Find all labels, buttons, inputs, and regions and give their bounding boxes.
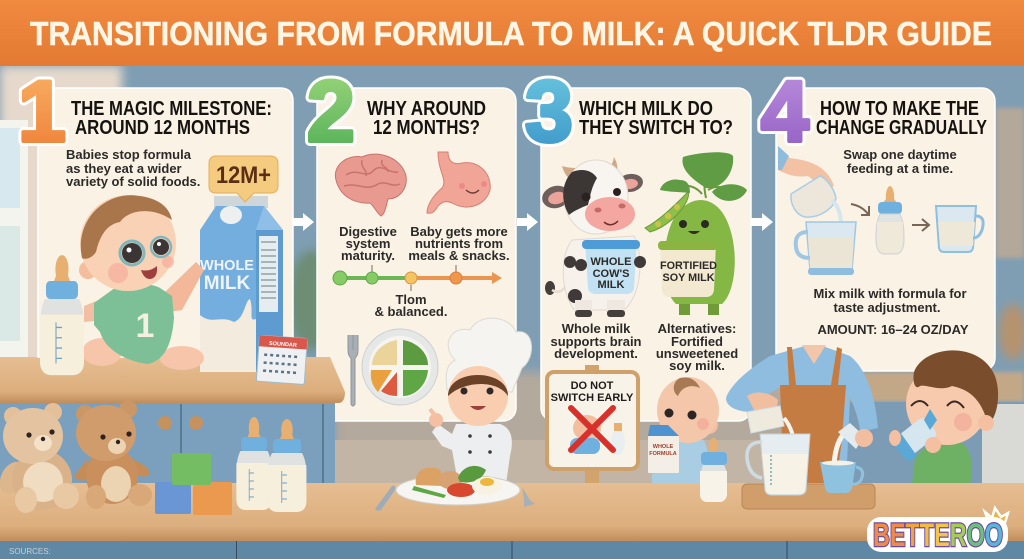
illustration: baby with carton xyxy=(648,377,719,484)
big numeral 4: 4 xyxy=(761,64,809,160)
arrow: step 3 to 4 xyxy=(751,213,773,231)
text: intro: variety of solid foods. xyxy=(66,174,200,189)
big numeral 4: 4 xyxy=(761,64,809,160)
teddy bear left xyxy=(0,403,79,513)
icon: brain xyxy=(335,154,406,216)
heading: step 3: WHICH MILK DO xyxy=(579,98,713,120)
icon: calendar xyxy=(256,335,307,384)
food plate xyxy=(396,466,520,505)
label: whole cow's milk: COW'S xyxy=(593,268,629,280)
wooden counter xyxy=(0,483,1024,541)
text: nutrients: nutrients from xyxy=(415,236,503,251)
text: amount: AMOUNT: 16–24 OZ/DAY xyxy=(818,322,969,337)
icon: baby bottle xyxy=(40,255,84,375)
text: whole milk: development. xyxy=(554,346,638,361)
carton label: WHOLE xyxy=(200,258,254,274)
arrow: bottle to cup xyxy=(912,219,929,231)
heading: step 1: THE MAGIC MILESTONE: xyxy=(71,98,272,120)
text: whole milk: supports brain xyxy=(550,334,642,349)
logo: Betteroo: BETTEROO xyxy=(873,517,1003,553)
illustration: parent pouring milk xyxy=(726,345,878,484)
icon: measuring jug xyxy=(796,222,856,275)
label: whole cow's milk: MILK xyxy=(598,279,624,291)
small carton: FORMULA xyxy=(649,451,677,457)
text: alternatives: unsweetened xyxy=(656,346,738,361)
small carton xyxy=(648,425,679,473)
icon: small bottles on counter xyxy=(236,417,306,512)
callout: 12M+ xyxy=(209,156,278,202)
text: digestive: Digestive xyxy=(339,224,397,239)
cabinet under shelf xyxy=(0,400,335,485)
callout: 12M+: 12M+ xyxy=(216,162,271,189)
icon: knife xyxy=(375,486,395,511)
teddy bear right xyxy=(74,400,152,509)
text: whole milk: Whole milk xyxy=(562,321,631,336)
bottom cabinet strip xyxy=(0,541,1024,559)
heading: step 1: AROUND 12 MONTHS xyxy=(75,117,250,139)
panel: step 2 xyxy=(317,88,516,421)
illustration: chef boy xyxy=(429,318,532,484)
text: swap: feeding at a time. xyxy=(847,161,953,176)
wooden shelf xyxy=(0,357,345,403)
panel: step 4 xyxy=(776,88,995,371)
heading: step 2: WHY AROUND xyxy=(367,98,486,120)
sign: do not switch early xyxy=(547,365,638,485)
text: swap: Swap one daytime xyxy=(843,147,957,162)
milk carton xyxy=(200,196,283,372)
big numeral 1: 1 xyxy=(18,64,66,160)
text: mix: taste adjustment. xyxy=(834,300,940,315)
text: digestive: system xyxy=(346,236,390,251)
carton label: MILK xyxy=(204,273,250,294)
icon: divided plate xyxy=(362,329,438,405)
illustration: toddler xyxy=(889,350,998,484)
icon: counter fork xyxy=(522,487,535,507)
label: fortified soy milk: FORTIFIED xyxy=(660,260,717,272)
heading: step 2: 12 MONTHS? xyxy=(373,117,480,139)
text: mix: Mix milk with formula for xyxy=(813,286,967,301)
text: nutrients: meals & snacks. xyxy=(408,248,510,263)
big numeral 2: 2 xyxy=(307,64,355,160)
background room xyxy=(0,66,1024,486)
arrow: step 1 to 2 xyxy=(293,213,314,231)
big numeral 2: 2 xyxy=(307,64,355,160)
bottle on counter xyxy=(700,438,727,502)
timeline arrow xyxy=(333,265,502,291)
arrow: jug to bottle xyxy=(851,204,869,215)
illustration: baby with number 1 onesie xyxy=(79,195,204,370)
text: balanced: Tlom xyxy=(395,292,427,307)
panel: step 1 xyxy=(38,88,293,375)
text: alternatives: Alternatives: xyxy=(658,321,736,336)
big numeral 1: 1 xyxy=(18,64,66,160)
heading: step 3: THEY SWITCH TO? xyxy=(579,117,733,139)
text: intro: Babies stop formula xyxy=(66,147,192,162)
toy blocks xyxy=(155,453,232,515)
sign: do not switch early: SWITCH EARLY xyxy=(551,392,634,404)
icon: hand pouring milk xyxy=(778,146,841,228)
arrow: step 2 to 3 xyxy=(517,213,538,231)
icon: cup of milk xyxy=(936,206,983,252)
panel: step 3 xyxy=(540,88,751,421)
big numeral 3: 3 xyxy=(525,64,573,160)
icon: bottle xyxy=(876,186,904,254)
small carton: WHOLE xyxy=(653,444,674,450)
label: whole cow's milk: WHOLE xyxy=(591,256,631,268)
text: intro: as they eat a wider xyxy=(66,161,182,176)
text: alternatives: Fortified xyxy=(671,334,723,349)
header banner xyxy=(0,0,1024,66)
text: balanced: & balanced. xyxy=(375,304,447,319)
big numeral 3: 3 xyxy=(525,64,573,160)
sign: do not switch early: DO NOT xyxy=(571,380,614,392)
icon: stomach xyxy=(427,152,490,213)
text: alternatives: soy milk. xyxy=(669,358,725,373)
tray with jug and cup xyxy=(742,434,875,509)
icon: fork xyxy=(348,335,358,406)
icon: calendar: SOUNDAR xyxy=(269,341,297,349)
icon: cow holding whole milk xyxy=(540,157,646,317)
heading: step 4: HOW TO MAKE THE xyxy=(820,98,979,120)
label: fortified soy milk: SOY MILK xyxy=(662,272,715,284)
text: sources: SOURCES: xyxy=(9,547,51,556)
text: nutrients: Baby gets more xyxy=(410,224,508,239)
illustration: baby with number 1 onesie: 1 xyxy=(136,307,154,345)
text: digestive: maturity. xyxy=(341,248,395,263)
icon: soy bean holding fortified soy milk xyxy=(645,152,747,315)
